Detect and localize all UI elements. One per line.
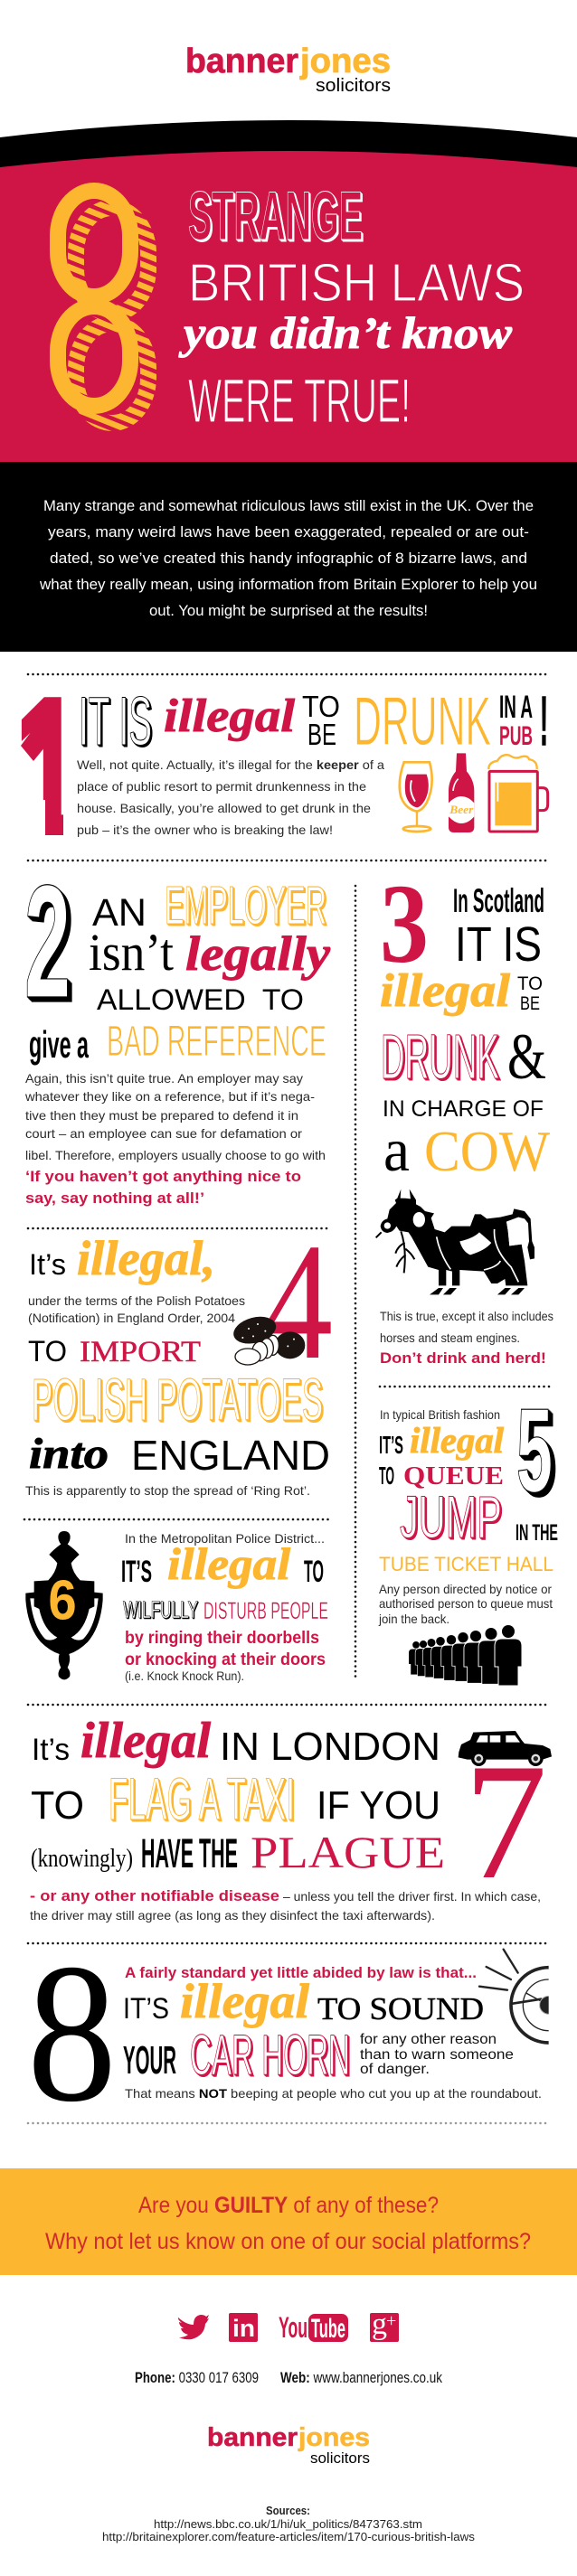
callout quote: say, say nothing at all!’ bbox=[25, 1189, 204, 1207]
heading law 3: TO bbox=[517, 973, 543, 994]
body text law 7 bbox=[30, 1887, 541, 1923]
sources bbox=[102, 2504, 476, 2543]
icon: wine glass bbox=[400, 762, 432, 832]
heading law 5: TUBE TICKET HALL bbox=[379, 1553, 553, 1575]
heading law 6 bbox=[121, 1531, 328, 1624]
heading law 5 bbox=[379, 1407, 558, 1575]
body text law 2: libel. Therefore, employers usually choose to go with bbox=[25, 1148, 326, 1162]
panel: intro text: what they really mean, using information from Britain Explorer to help you bbox=[39, 576, 537, 593]
callout quote bbox=[25, 1168, 301, 1207]
heading law 8: IT’S bbox=[123, 1992, 169, 2025]
contact details: Web: www.bannerjones.co.uk bbox=[280, 2369, 442, 2386]
sources: http://news.bbc.co.uk/1/hi/uk_politics/8473763.stm bbox=[154, 2517, 422, 2531]
header logo: solicitors bbox=[316, 76, 391, 96]
heading law 7: IN LONDON bbox=[220, 1725, 440, 1769]
heading law 1: illegal bbox=[164, 691, 296, 742]
icon: beer bottle bbox=[449, 753, 474, 832]
body text law 4: This is apparently to stop the spread of ‘Ring Rot’. bbox=[25, 1483, 310, 1498]
panel: law 1 bbox=[21, 696, 550, 837]
heading law 1: PUB bbox=[499, 721, 533, 751]
social icons bbox=[178, 2308, 399, 2344]
title: BRITISH LAWS bbox=[188, 253, 525, 313]
heading law 7: It’s bbox=[32, 1733, 70, 1767]
heading law 3: COW bbox=[424, 1119, 551, 1183]
heading law 1: BE bbox=[307, 718, 336, 751]
panel: intro text: dated, so we’ve created this handy infographic of 8 bizarre laws, and bbox=[50, 550, 527, 567]
header logo: banner bbox=[185, 42, 298, 80]
heading law 2: give a bbox=[29, 1023, 89, 1066]
heading law 7: (knowingly) bbox=[31, 1845, 133, 1873]
heading law 7: illegal bbox=[80, 1713, 211, 1769]
body text law 5: join the back. bbox=[378, 1612, 449, 1626]
title bbox=[179, 178, 525, 436]
body text law 7: - or any other notifiable disease bbox=[30, 1887, 279, 1904]
number 3: 3 bbox=[380, 862, 429, 987]
heading law 7: IF YOU bbox=[317, 1783, 440, 1828]
icon: cow bbox=[376, 1189, 534, 1294]
icons: wine, beer bottle, beer mug bbox=[400, 753, 548, 832]
title: you didn’t know bbox=[179, 307, 513, 358]
heading law 5: illegal bbox=[410, 1420, 505, 1461]
body text law 5 bbox=[378, 1582, 553, 1626]
heading law 5: TO bbox=[379, 1462, 394, 1490]
heading law 4: under the terms of the Polish Potatoes bbox=[28, 1293, 245, 1308]
heading law 4: into bbox=[29, 1430, 109, 1478]
heading law 4: It’s bbox=[29, 1248, 66, 1281]
icon: door knocker with number 6 bbox=[25, 1531, 103, 1679]
number 7: 7 bbox=[464, 1729, 547, 1913]
body text law 8: That means NOT beeping at people who cut you up at the roundabout. bbox=[125, 2086, 542, 2101]
icon: potatoes bbox=[231, 1312, 305, 1365]
callout: ringing doorbells: by ringing their doorbells bbox=[125, 1629, 319, 1648]
heading law 7: PLAGUE bbox=[251, 1827, 445, 1877]
heading law 3: IN CHARGE OF bbox=[383, 1096, 544, 1122]
body text law 5: authorised person to queue must bbox=[379, 1596, 553, 1611]
heading law 8 bbox=[123, 1964, 484, 2087]
callout: ringing doorbells: or knocking at their doors bbox=[125, 1650, 326, 1669]
panel: law 4 bbox=[25, 1209, 333, 1498]
icon: google plus bbox=[370, 2308, 399, 2342]
panel: call to action: Are you GUILTY of any of these? bbox=[138, 2193, 439, 2218]
icon: door knocker with number 6: 6 bbox=[48, 1570, 77, 1632]
body text law 8: of danger. bbox=[360, 2062, 430, 2077]
body text law 8 bbox=[125, 2032, 542, 2101]
icon: london taxi bbox=[459, 1731, 552, 1766]
heading law 5: IT’S bbox=[379, 1431, 403, 1459]
contact details: Phone: 0330 017 6309 bbox=[135, 2369, 259, 2386]
contact details bbox=[135, 2369, 442, 2386]
panel: law 6 bbox=[25, 1531, 328, 1683]
heading law 5: QUEUE bbox=[403, 1462, 504, 1490]
panel: intro text: Many strange and somewhat ridiculous laws still exist in the UK. Over the bbox=[43, 497, 534, 514]
heading law 6: IT’S bbox=[121, 1555, 152, 1589]
body text law 7: the driver may still agree (as long as they disinfect the taxi afterwards). bbox=[30, 1908, 435, 1923]
panel: intro text: years, many weird laws have been exaggerated, repealed or are out- bbox=[48, 523, 529, 541]
body text law 3 bbox=[380, 1309, 553, 1345]
heading law 7: FLAG A TAXI bbox=[109, 1765, 295, 1832]
icon: queue of people bbox=[409, 1625, 522, 1686]
body text law 2: Again, this isn’t quite true. An employer may say bbox=[25, 1071, 303, 1086]
number 8: 8 bbox=[27, 1923, 117, 2143]
heading law 8: CAR HORN bbox=[190, 2024, 350, 2087]
body text law 1: house. Basically, you’re allowed to get drunk in the bbox=[77, 801, 371, 815]
body text law 7: – unless you tell the driver first. In which case, bbox=[283, 1889, 541, 1904]
icon: google plus: g bbox=[372, 2308, 387, 2341]
body text law 3: horses and steam engines. bbox=[380, 1330, 520, 1345]
panel: law 2 bbox=[24, 851, 331, 1207]
heading law 6: illegal bbox=[167, 1538, 290, 1589]
heading law 3: IT IS bbox=[455, 917, 542, 972]
number 1 bbox=[21, 697, 63, 835]
panel: law 8 bbox=[34, 1949, 549, 2102]
sources: Sources: bbox=[266, 2504, 310, 2517]
heading law 2 bbox=[29, 876, 331, 1066]
header logo bbox=[185, 42, 391, 96]
heading law 4: TO bbox=[28, 1335, 67, 1368]
icon: beer bottle: Beer bbox=[449, 804, 474, 816]
heading law 3: illegal bbox=[380, 965, 511, 1017]
callout: ringing doorbells bbox=[125, 1629, 326, 1669]
body text law 8: than to warn someone bbox=[360, 2047, 514, 2063]
panel: intro text bbox=[0, 462, 577, 652]
heading law 6: TO bbox=[304, 1555, 324, 1589]
panel: law 3 bbox=[376, 862, 553, 1367]
panel: law 7 bbox=[30, 1713, 552, 1923]
heading law 1: IT IS bbox=[79, 683, 152, 760]
footer logo: jones bbox=[298, 2423, 370, 2452]
body text law 6: (i.e. Knock Knock Run). bbox=[125, 1669, 244, 1683]
heading law 3: a bbox=[383, 1115, 410, 1184]
heading law 2: AN bbox=[92, 891, 147, 935]
icon: steering wheel with horn rays bbox=[478, 1949, 549, 2045]
icon: youtube: Tube bbox=[311, 2314, 345, 2344]
body text law 5: Any person directed by notice or bbox=[379, 1582, 552, 1596]
header logo: jones bbox=[299, 42, 391, 80]
heading law 7: HAVE THE bbox=[141, 1830, 238, 1876]
heading law 6: WILFULLY bbox=[123, 1596, 198, 1623]
panel: call to action: Why not let us know on one of our social platforms? bbox=[45, 2229, 531, 2254]
icon: google plus: + bbox=[386, 2311, 396, 2331]
text: ! bbox=[540, 682, 548, 760]
icon: beer mug bbox=[488, 755, 548, 832]
heading law 8: illegal bbox=[180, 1974, 309, 2028]
number 1: 1 bbox=[13, 654, 86, 879]
heading law 2: legally bbox=[185, 926, 331, 981]
icon: youtube: You bbox=[279, 2311, 307, 2344]
body text law 1: place of public resort to permit drunkenness in the bbox=[77, 779, 366, 794]
title: WERE TRUE! bbox=[188, 366, 411, 436]
footer logo: solicitors bbox=[310, 2449, 370, 2467]
heading law 6: In the Metropolitan Police District... bbox=[125, 1531, 325, 1546]
heading law 8: YOUR bbox=[123, 2038, 176, 2082]
heading law 1: IN A bbox=[499, 690, 533, 725]
heading law 4: ENGLAND bbox=[131, 1432, 330, 1479]
body text law 3: This is true, except it also includes bbox=[380, 1309, 553, 1323]
body text law 1: pub – it’s the owner who is breaking the law! bbox=[77, 823, 333, 837]
heading law 5: In typical British fashion bbox=[380, 1407, 500, 1422]
footer logo: banner bbox=[207, 2423, 298, 2452]
body text law 2: court – an employee can sue for defamation or bbox=[25, 1126, 302, 1141]
body text law 2: whatever they like on a reference, but if it’s nega- bbox=[24, 1089, 315, 1104]
body text law 1: Well, not quite. Actually, it’s illegal for the keeper of a bbox=[77, 757, 384, 772]
body text law 2 bbox=[24, 1071, 326, 1162]
number 2: 2 bbox=[24, 851, 71, 1031]
icon: twitter bbox=[178, 2315, 209, 2339]
panel: hero banner bbox=[0, 120, 577, 462]
heading law 2: BAD REFERENCE bbox=[107, 1018, 326, 1066]
panel: intro text: out. You might be surprised at the results! bbox=[149, 602, 428, 619]
heading law 4 bbox=[28, 1231, 330, 1479]
heading law 4: POLISH POTATOES bbox=[32, 1366, 323, 1433]
body text law 2: tive then they must be prepared to defend it in bbox=[25, 1108, 298, 1123]
heading law 6: DISTURB PEOPLE bbox=[203, 1597, 328, 1624]
heading law 1: TO bbox=[302, 690, 340, 723]
heading law 4: IMPORT bbox=[80, 1336, 201, 1368]
heading law 8: TO SOUND bbox=[317, 1991, 484, 2026]
heading law 3: & bbox=[507, 1020, 546, 1093]
heading law 3 bbox=[380, 882, 551, 1184]
body text law 8: for any other reason bbox=[360, 2032, 497, 2047]
heading law 7 bbox=[31, 1713, 445, 1877]
callout quote: ‘If you haven’t got anything nice to bbox=[25, 1168, 301, 1185]
panel: call to action bbox=[0, 2168, 577, 2275]
heading law 4: (Notification) in England Order, 2004 bbox=[28, 1311, 235, 1325]
body text law 1 bbox=[77, 757, 384, 837]
callout: don't drink and herd: Don’t drink and herd! bbox=[380, 1349, 546, 1367]
heading law 2: ALLOWED TO bbox=[97, 983, 304, 1016]
title: STRANGE bbox=[188, 178, 363, 255]
heading law 2: EMPLOYER bbox=[165, 876, 326, 935]
heading law 4: illegal, bbox=[77, 1231, 215, 1285]
heading law 5: JUMP bbox=[400, 1483, 502, 1550]
heading law 1 bbox=[79, 682, 548, 760]
heading law 7: TO bbox=[31, 1783, 84, 1828]
heading law 2: isn’t bbox=[89, 923, 174, 982]
panel: law 5 bbox=[378, 1384, 558, 1686]
number 4: 4 bbox=[264, 1209, 333, 1395]
heading law 3: BE bbox=[520, 993, 540, 1014]
sources: http://britainexplorer.com/feature-articles/item/170-curious-british-laws bbox=[102, 2530, 476, 2543]
footer logo bbox=[207, 2423, 370, 2467]
heading law 8: A fairly standard yet little abided by law is that... bbox=[125, 1964, 477, 1981]
icon: linkedin: in bbox=[232, 2315, 255, 2342]
big yellow striped number 8 bbox=[58, 191, 148, 423]
